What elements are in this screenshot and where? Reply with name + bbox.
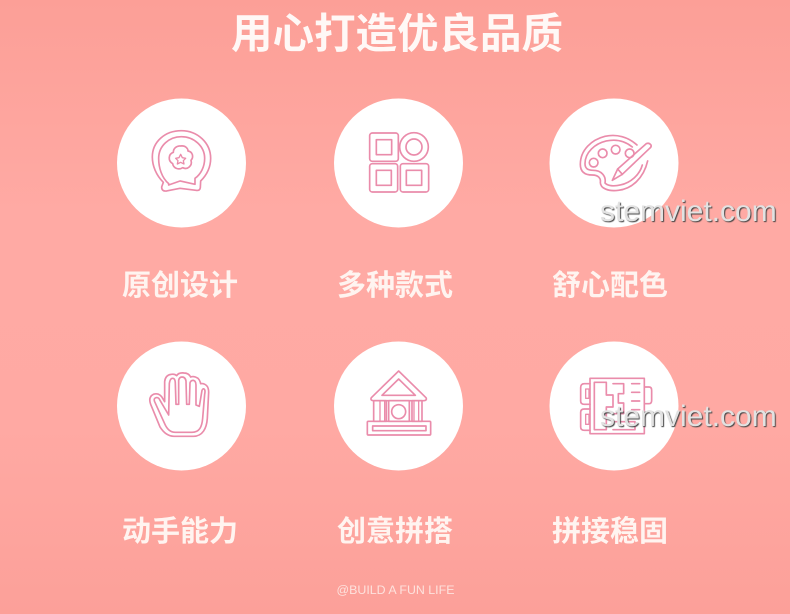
icon: open hand (117, 342, 246, 470)
watermark top: stemviet.com (600, 195, 777, 228)
label: 创意拼搭: 创意拼搭 (337, 516, 453, 548)
icon: medal badge (117, 98, 246, 228)
label: 拼接稳固: 拼接稳固 (552, 516, 668, 548)
label: 舒心配色: 舒心配色 (552, 270, 668, 302)
label: 原创设计: 原创设计 (122, 270, 238, 302)
icon: four building blocks (334, 98, 463, 228)
footer text: @BUILD A FUN LIFE (337, 583, 454, 597)
icon: circuit-like building plate (550, 342, 678, 470)
title: 用心打造优良品质 (231, 10, 563, 57)
icon: paint palette (550, 98, 678, 228)
watermark bottom: stemviet.com (600, 400, 777, 433)
label: 多种款式: 多种款式 (337, 270, 453, 302)
label: 动手能力: 动手能力 (122, 516, 238, 548)
icon: temple building (334, 342, 463, 470)
